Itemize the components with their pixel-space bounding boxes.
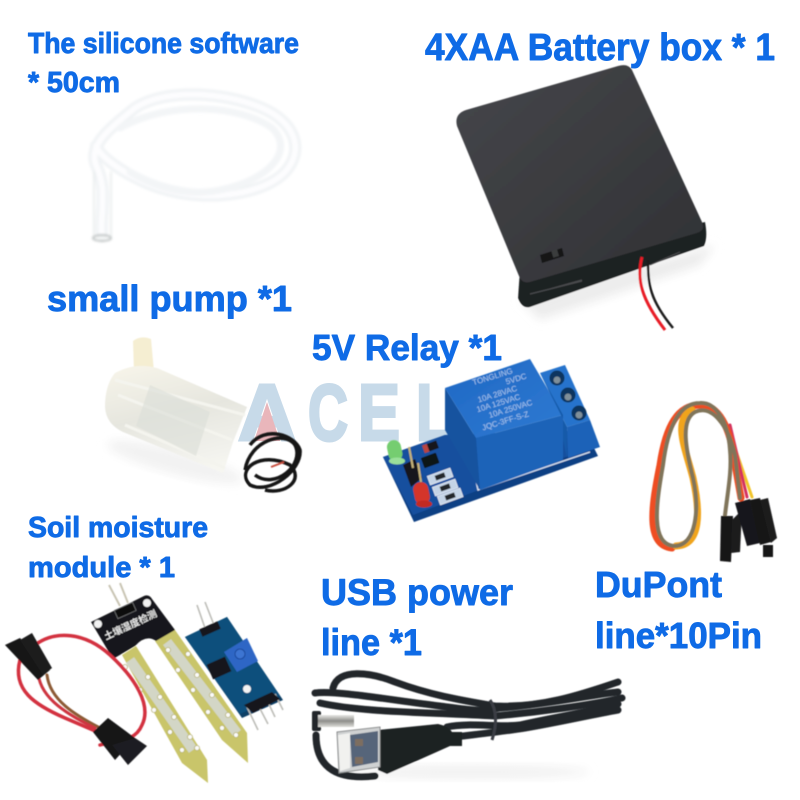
- label: soil moisture: Soil moisture: [28, 512, 208, 544]
- label: relay: 5V Relay *1: [312, 327, 502, 368]
- label: DuPont line: [595, 564, 762, 656]
- relay markings: TONGLING: [471, 366, 514, 387]
- relay components: [422, 441, 439, 453]
- sensor board: [185, 617, 283, 718]
- label: small pump: small pump *1: [47, 278, 292, 319]
- relay terminal block: [540, 365, 590, 427]
- label: DuPont line: line*10Pin: [595, 615, 762, 656]
- led: green: [386, 439, 405, 464]
- led: red: [412, 481, 432, 508]
- relay markings: [468, 363, 539, 432]
- DuPont connectors: [720, 516, 733, 562]
- relay markings: 10A 28VAC: [477, 384, 518, 404]
- pump body: [105, 366, 247, 473]
- relay board: [383, 430, 598, 522]
- sensor potentiometer: [224, 638, 258, 672]
- pump wires: [245, 434, 300, 491]
- icon: pump: [104, 337, 300, 492]
- battery wires: [640, 257, 665, 330]
- watermark: ACEL: C: [308, 368, 348, 457]
- label: battery box: 4XAA Battery box * 1: [425, 27, 775, 69]
- USB metal shell: [337, 727, 380, 773]
- probe prongs: [122, 646, 208, 783]
- sensor chip: [207, 657, 231, 679]
- icon: battery box: [456, 65, 715, 330]
- sensor pins: [197, 602, 283, 730]
- relay housing: [445, 388, 480, 490]
- relay markings: JQC-3FF-S-Z: [481, 410, 530, 432]
- watermark: ACEL: [238, 368, 452, 457]
- label: USB power line: [321, 572, 513, 663]
- icon: DuPont ribbon: [653, 403, 777, 562]
- battery box lid: [456, 65, 703, 282]
- label: silicone tube: [28, 28, 299, 99]
- icon: soil moisture probe: 土壤湿度检测: [102, 608, 159, 643]
- watermark: ACEL: A: [238, 368, 296, 457]
- label: soil moisture: module * 1: [28, 552, 175, 584]
- battery box side: [518, 222, 706, 307]
- watermark: ACEL: E: [358, 368, 400, 457]
- label: USB power line: line *1: [321, 622, 422, 663]
- relay markings: 10A 250VAC: [488, 398, 534, 420]
- icon: silicone tube: [93, 94, 295, 241]
- label: silicone tube: * 50cm: [28, 67, 120, 99]
- pump nozzle: [133, 337, 154, 372]
- USB cable coils: [315, 674, 622, 777]
- USB barrel plug: [312, 711, 321, 731]
- probe pins: [109, 583, 128, 606]
- icon: relay module: [383, 359, 600, 522]
- watermark: ACEL: L: [416, 368, 452, 457]
- battery switch: [540, 248, 564, 263]
- label: DuPont line: DuPont: [595, 564, 722, 605]
- icon: USB cable: [312, 674, 622, 779]
- relay pins: [403, 459, 422, 487]
- relay markings: 5VDC: [505, 372, 528, 386]
- icon: soil moisture probe: [5, 583, 283, 783]
- sensor wire connectors: [18, 635, 145, 745]
- label: silicone tube: The silicone software: [28, 28, 299, 60]
- probe head: [91, 595, 175, 659]
- relay markings: 10A 125VAC: [475, 392, 522, 414]
- USB plug body: [378, 724, 462, 774]
- label: soil moisture: [28, 512, 208, 584]
- label: USB power line: USB power: [321, 572, 513, 613]
